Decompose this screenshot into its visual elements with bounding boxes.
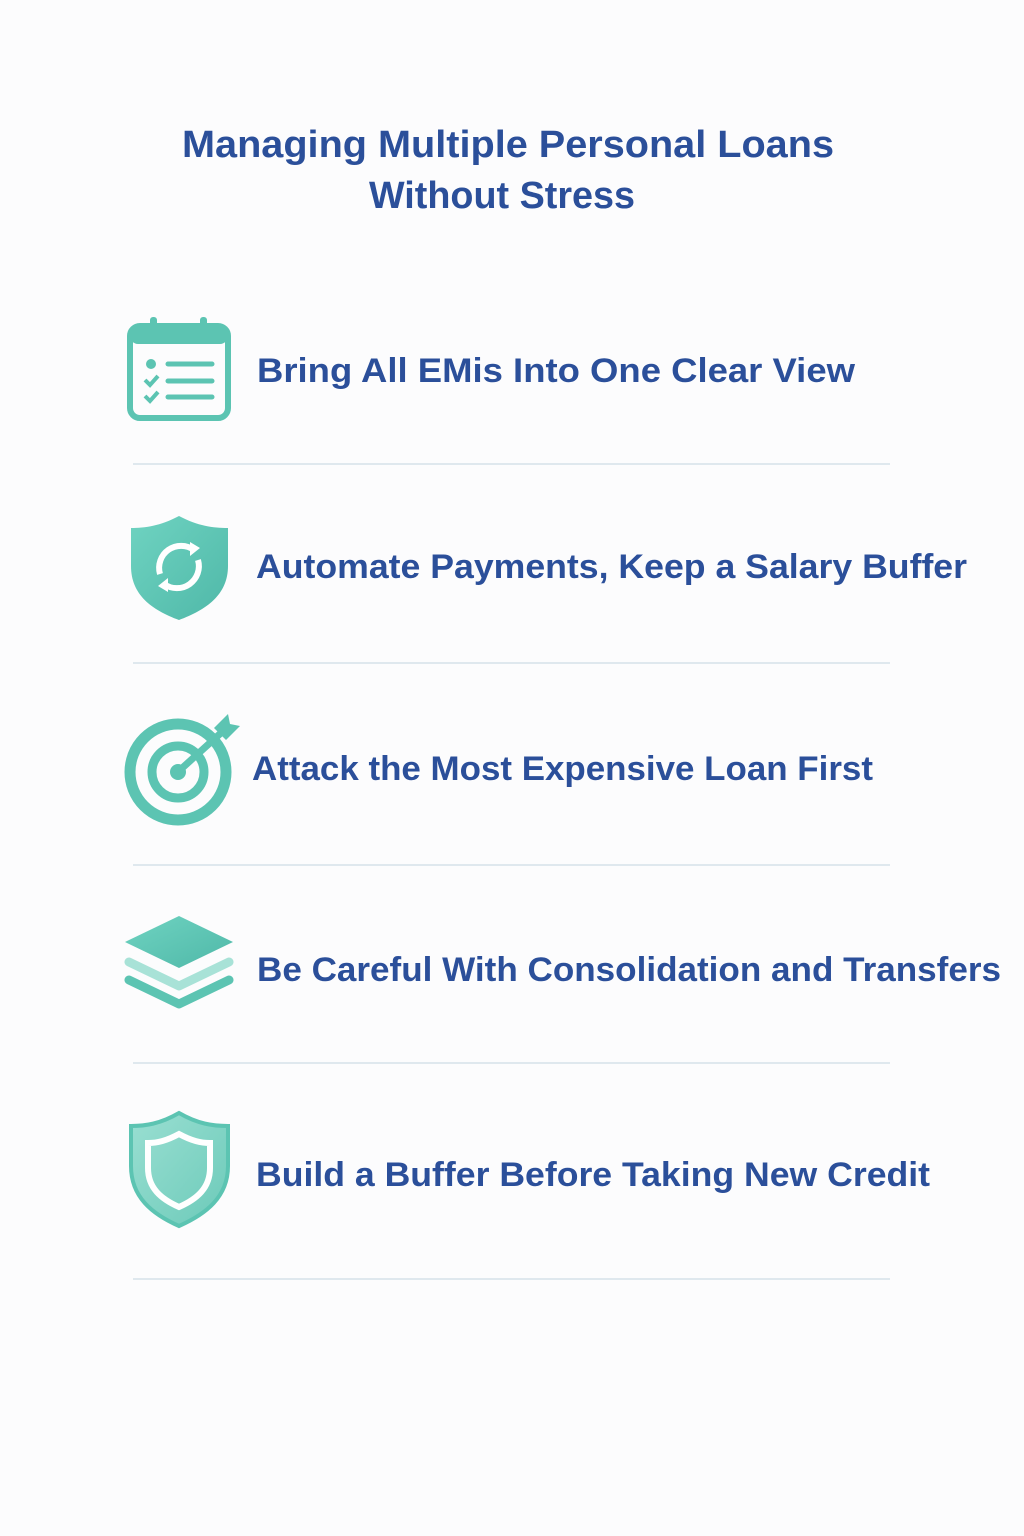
title: Managing Multiple Personal Loans — [182, 124, 834, 166]
text: Bring All EMis Into One Clear View — [257, 352, 856, 390]
text: Build a Buffer Before Taking New Credit — [256, 1156, 930, 1194]
icon: target — [130, 714, 240, 820]
item 5 — [131, 1113, 930, 1226]
text: Automate Payments, Keep a Salary Buffer — [256, 548, 967, 586]
item 1 — [130, 317, 856, 418]
item 4 — [125, 916, 1001, 1004]
icon: shield — [131, 1113, 228, 1226]
title: Without Stress — [369, 175, 635, 217]
icon: calendar checklist — [130, 317, 228, 418]
text: Be Careful With Consolidation and Transfers — [257, 951, 1001, 989]
icon: shield refresh — [131, 516, 228, 620]
text: Attack the Most Expensive Loan First — [252, 750, 873, 788]
title — [182, 124, 834, 217]
icon: layers — [125, 916, 233, 1004]
item 2 — [131, 516, 967, 620]
item 3 — [130, 714, 873, 820]
